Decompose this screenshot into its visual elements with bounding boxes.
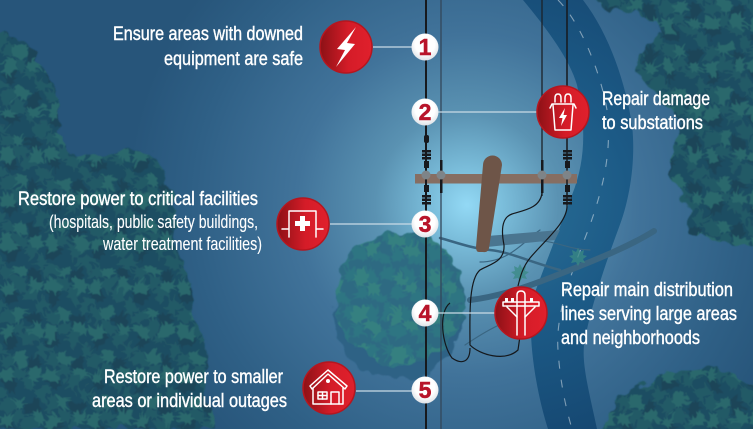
step 5 marker: 5 <box>419 377 432 403</box>
step 3 marker: 3 <box>419 211 431 237</box>
icon: utility pole <box>495 287 547 339</box>
step 1 marker: 1 <box>419 34 432 60</box>
tree: bottom right <box>600 366 753 429</box>
leaves on branch <box>511 248 587 282</box>
step 1 marker <box>412 34 438 60</box>
text: step 3: water treatment facilities) <box>102 234 262 254</box>
fallen branch <box>440 230 654 345</box>
text: step 3 <box>18 189 262 254</box>
text: step 4: and neighborhoods <box>561 328 700 349</box>
road <box>523 0 633 429</box>
step 5 marker <box>412 376 438 404</box>
text: step 2: Repair damage <box>602 89 710 110</box>
step 2 marker <box>412 98 438 126</box>
step 4 marker: 4 <box>419 300 432 326</box>
icon: substation transformer <box>537 86 589 138</box>
text: step 5: areas or individual outages <box>92 391 287 412</box>
wires and insulators <box>422 0 572 429</box>
icon: lightning bolt <box>320 21 372 73</box>
text: step 1: Ensure areas with downed <box>113 24 303 45</box>
text: step 5 <box>92 367 287 412</box>
tree: fallen center <box>334 232 466 380</box>
text: step 1: equipment are safe <box>164 49 303 70</box>
text: step 3: (hospitals, public safety buildings, <box>49 212 258 232</box>
step 4 marker <box>412 300 438 326</box>
fallen crossarm <box>487 230 560 247</box>
text: step 5: Restore power to smaller <box>104 367 284 388</box>
text: step 4 <box>561 280 737 349</box>
tree: top right <box>590 0 753 248</box>
connector lines <box>330 47 537 391</box>
step 3 marker <box>412 210 438 238</box>
tree: left <box>0 36 216 429</box>
text: step 1 <box>113 24 303 70</box>
utility pole <box>415 156 577 252</box>
text: step 3: Restore power to critical facilities <box>18 189 258 210</box>
icon: hospital building <box>277 198 329 250</box>
step 2 marker: 2 <box>419 99 431 125</box>
text: step 2 <box>602 89 710 134</box>
icon: house <box>303 362 355 414</box>
text: step 2: to substations <box>602 113 703 134</box>
